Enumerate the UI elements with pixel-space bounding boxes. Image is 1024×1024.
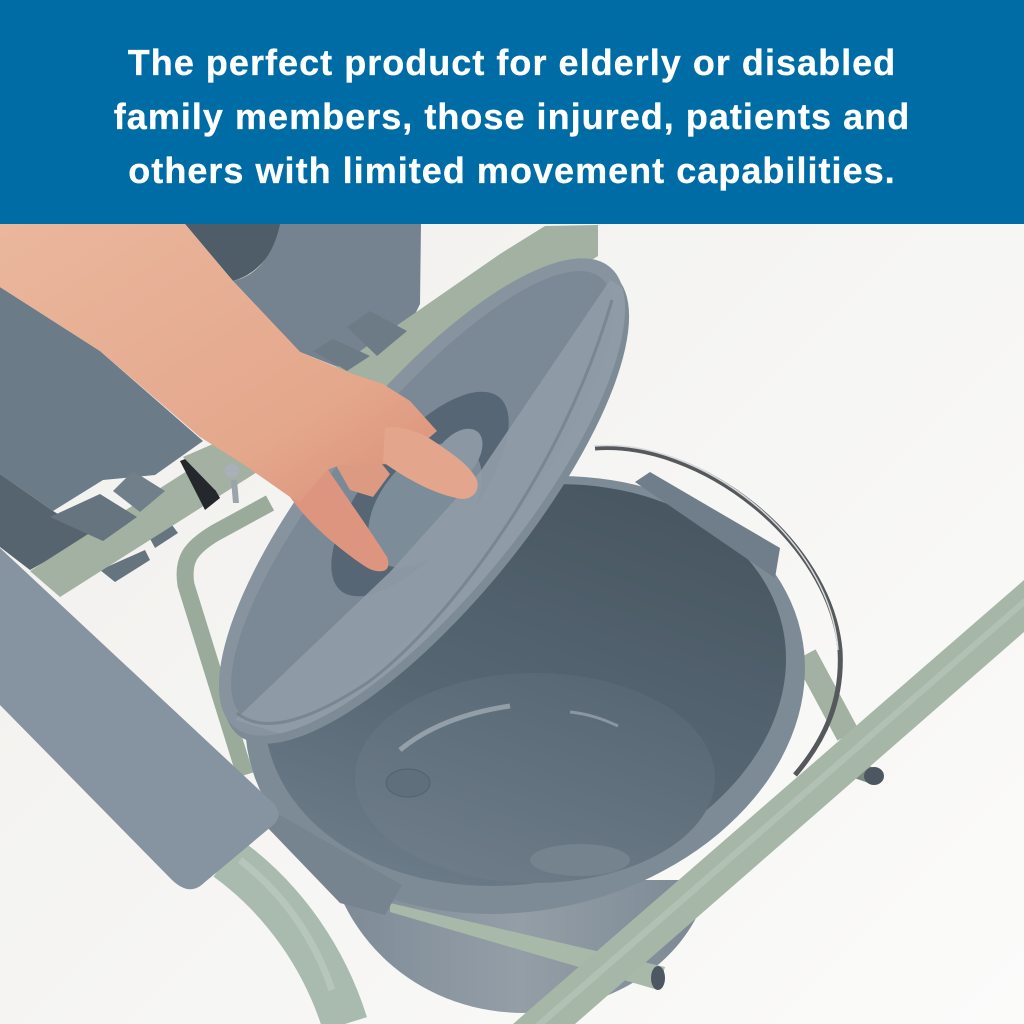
headline xyxy=(114,42,910,191)
lower front frame bar xyxy=(390,903,665,990)
little finger xyxy=(290,468,388,571)
seat hinge tabs over tube xyxy=(50,311,407,541)
bucket wire handle xyxy=(595,448,840,775)
translucent lower half of lid xyxy=(241,285,625,733)
rear frame tube xyxy=(30,225,598,597)
headline: family members, those injured, patients and xyxy=(114,96,910,137)
product photo illustration xyxy=(0,224,1024,1024)
bucket lip tab xyxy=(265,815,402,915)
lid knob xyxy=(345,419,505,589)
lid inner ring line xyxy=(237,300,612,723)
pipe stub right xyxy=(835,763,876,777)
lid lower lip xyxy=(161,212,691,798)
bucket floor xyxy=(355,673,715,883)
bucket xyxy=(201,422,849,968)
index finger xyxy=(383,427,478,499)
hand and forearm xyxy=(0,224,478,571)
lid centre recess xyxy=(301,364,539,624)
bucket rim xyxy=(201,422,849,968)
lid inner dish xyxy=(176,223,668,771)
padded armrest xyxy=(0,548,279,889)
lid outer rim xyxy=(157,204,687,790)
bucket handle mount xyxy=(635,472,780,578)
tabs below rear frame tube xyxy=(100,550,150,582)
left green leg loop xyxy=(185,503,270,775)
lid xyxy=(219,258,630,744)
hinge hardware xyxy=(180,444,248,510)
bucket interior xyxy=(223,434,827,936)
headline: The perfect product for elderly or disabled xyxy=(128,42,896,83)
second finger xyxy=(333,458,390,497)
palm and forearm xyxy=(0,224,437,502)
right side leg tube behind bucket xyxy=(805,655,848,735)
bucket body below rim xyxy=(340,880,700,1013)
background seat and raised lid xyxy=(0,224,421,570)
header banner xyxy=(0,0,1024,224)
front frame tube xyxy=(513,580,1024,1024)
headline: others with limited movement capabilities. xyxy=(128,150,896,191)
front curved leg xyxy=(227,858,345,1024)
